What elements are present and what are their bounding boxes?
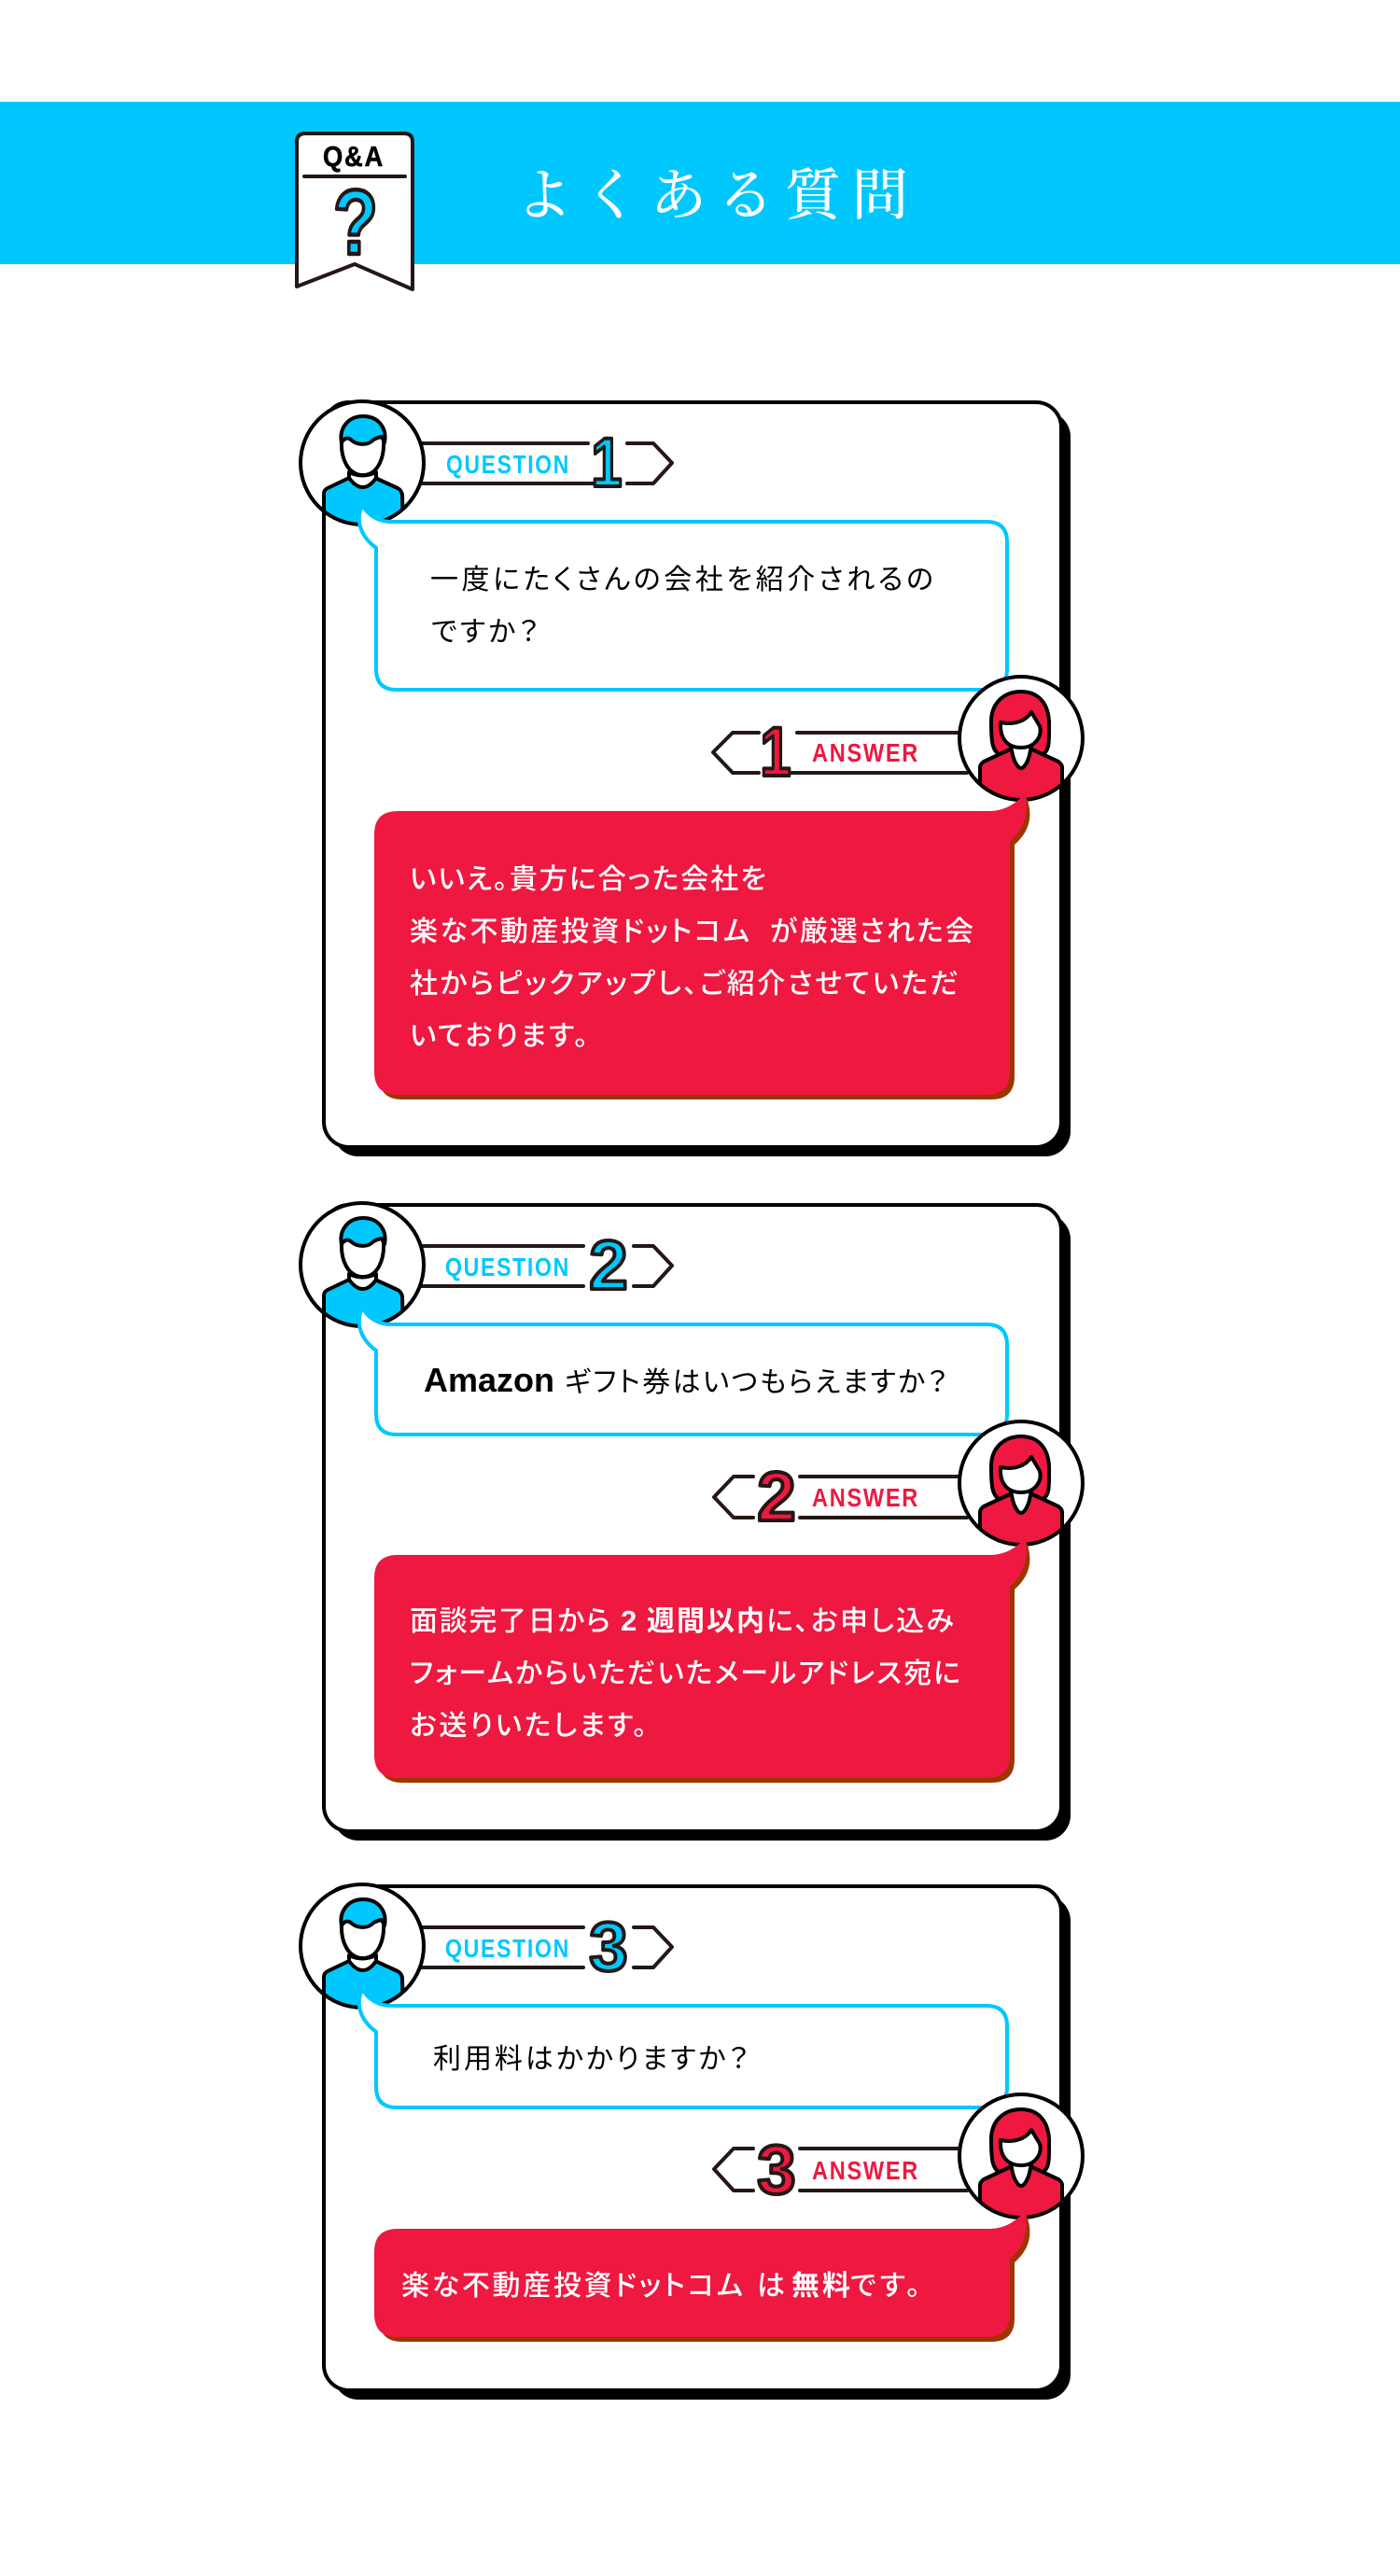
question 1 text: ですか？ — [431, 609, 539, 650]
question 1 label: QUESTION — [446, 450, 570, 479]
answer 1 text: 楽な不動産投資ドットコム — [410, 908, 749, 949]
answer 1 text — [410, 856, 973, 1054]
card 1 shadow — [333, 412, 1071, 1156]
icon: man avatar 2 — [301, 1203, 424, 1330]
answer 2 text: に、お申し込み — [766, 1598, 954, 1639]
answer 1 text: いております。 — [410, 1013, 588, 1054]
panel: question and answer 2 — [301, 1203, 1083, 1841]
question 2 label: QUESTION — [445, 1253, 570, 1281]
answer 3 text: です。 — [850, 2262, 920, 2303]
question 3 text: 利用料はかかりますか？ — [433, 2036, 749, 2077]
icon: woman avatar 2 — [959, 1421, 1083, 1548]
answer 3 text — [401, 2262, 920, 2303]
answer 3 text: は — [757, 2262, 785, 2303]
question bubble 3 — [359, 1989, 1007, 2107]
answer 3 label — [714, 2131, 967, 2208]
card 2 — [324, 1205, 1061, 1831]
answer 1 text: 社からピックアップし、ご紹介させていただ — [410, 960, 959, 1001]
header band — [0, 102, 1400, 264]
question bubble 2 — [359, 1308, 1007, 1435]
question 2 label — [422, 1226, 672, 1304]
answer 1 label: ANSWER — [812, 738, 919, 767]
title: よくある質問 — [516, 151, 908, 231]
icon: woman avatar 1 — [959, 677, 1083, 804]
answer 2 text: 2 — [621, 1604, 637, 1637]
card 1 — [324, 402, 1061, 1147]
card 3 shadow — [333, 1896, 1071, 2400]
answer 2 text: 週間以内 — [647, 1598, 764, 1639]
question 2 text: ギフト券はいつもらえますか？ — [565, 1359, 947, 1400]
question 1 text — [430, 556, 933, 650]
answer 1 text: が厳選された会 — [770, 908, 973, 949]
answer 1 text: いいえ。貴方に合った会社を — [410, 856, 766, 897]
answer 3 text: 楽な不動産投資ドットコム — [401, 2262, 743, 2303]
answer 2 text: 面談完了日から — [410, 1598, 610, 1639]
card 3 — [324, 1886, 1061, 2390]
question 1 label — [422, 425, 672, 502]
answer 3 label: ANSWER — [812, 2156, 919, 2185]
panel: question and answer 3 — [301, 1884, 1083, 2400]
question bubble 1 — [359, 505, 1007, 690]
icon: man avatar 3 — [301, 1884, 424, 2011]
question 3 label: 3 — [589, 1908, 628, 1985]
answer 2 text: フォームからいただいたメールアドレス宛に — [410, 1650, 960, 1691]
answer 1 label: 1 — [761, 714, 791, 791]
answer bubble 1 — [374, 793, 1029, 1099]
answer 2 label: 2 — [757, 1458, 796, 1535]
answer bubble 2 — [374, 1538, 1029, 1783]
answer 2 label — [714, 1458, 967, 1535]
answer bubble 3 — [374, 2211, 1029, 2342]
icon: Q&A ribbon: ? — [333, 172, 378, 273]
question 3 label — [422, 1908, 672, 1985]
icon: woman avatar 3 — [959, 2094, 1083, 2221]
answer 2 text: お送りいたします。 — [410, 1702, 647, 1743]
question 3 label: QUESTION — [445, 1934, 570, 1963]
question 2 text: Amazon — [424, 1361, 554, 1399]
answer 2 label: ANSWER — [812, 1483, 919, 1512]
answer 2 text — [410, 1598, 960, 1743]
question 1 label: 1 — [592, 425, 622, 502]
panel: question and answer 1 — [301, 401, 1083, 1156]
question 1 text: 一度にたくさんの会社を紹介されるの — [430, 556, 933, 597]
answer 1 label — [713, 714, 967, 791]
answer 3 label: 3 — [757, 2131, 796, 2208]
icon: Q&A ribbon — [297, 133, 413, 289]
icon: man avatar 1 — [301, 401, 424, 528]
card 2 shadow — [333, 1214, 1071, 1841]
answer 3 text: 無料 — [791, 2262, 850, 2303]
icon: Q&A ribbon: Q&A — [323, 140, 385, 173]
question 2 label: 2 — [589, 1226, 628, 1304]
